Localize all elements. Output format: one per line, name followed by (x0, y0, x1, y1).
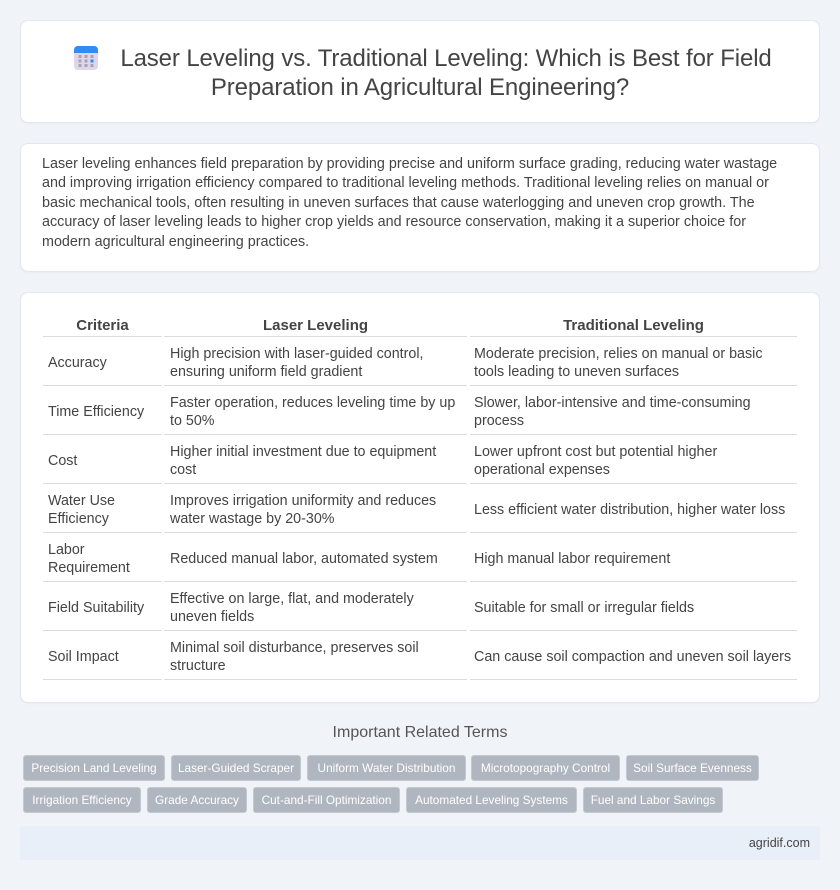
tag (171, 755, 301, 781)
row: soil impact: Minimal soil disturbance, preserves soil (170, 640, 419, 656)
row: accuracy: ensuring uniform field gradient (170, 364, 362, 380)
tag (23, 787, 141, 813)
row: field suitability (48, 591, 694, 625)
tag (307, 755, 466, 781)
tag: Irrigation Efficiency (32, 793, 132, 807)
row: soil impact: Can cause soil compaction and uneven soil layers (474, 649, 791, 665)
description text: Laser leveling enhances field preparation by providing precise and uniform surface grading, reducing water wastage (42, 156, 777, 172)
tag (23, 755, 165, 781)
description text (42, 156, 777, 250)
tag (471, 755, 620, 781)
heading: important related terms: Important Related Terms (333, 724, 507, 741)
row: time efficiency: Faster operation, reduces leveling time by up (170, 395, 455, 411)
row: labor requirement (48, 542, 670, 576)
row: accuracy: Accuracy (48, 355, 107, 371)
row: time efficiency: to 50% (170, 413, 215, 429)
title text: Laser Leveling vs. Traditional Leveling: Which is Best for Field (120, 45, 772, 72)
row: cost: Lower upfront cost but potential higher (474, 444, 717, 460)
tag (147, 787, 247, 813)
description text: basic mechanical tools, often resulting in uneven surfaces that cause waterlogging and uneven crop growth. The (42, 195, 755, 211)
footer bar (20, 826, 820, 860)
row: field suitability: Field Suitability (48, 600, 144, 616)
row: accuracy (48, 346, 762, 380)
row: time efficiency: Time Efficiency (48, 404, 144, 420)
tag: Uniform Water Distribution (318, 761, 455, 775)
table header: traditional leveling: Traditional Leveling (563, 317, 704, 334)
row: cost: cost (170, 462, 196, 478)
tag: Fuel and Labor Savings (591, 793, 715, 807)
row: cost: operational expenses (474, 462, 610, 478)
row: time efficiency: Slower, labor-intensive and time-consuming (474, 395, 751, 411)
row: labor requirement: High manual labor requirement (474, 551, 670, 567)
tag (583, 787, 723, 813)
table header: criteria: Criteria (76, 317, 129, 334)
description text: and improving irrigation efficiency compared to traditional leveling methods. Traditional leveling relies on manual or (42, 175, 769, 191)
row: water use efficiency: Less efficient water distribution, higher water loss (474, 502, 785, 518)
tag (406, 787, 577, 813)
row: field suitability: Effective on large, flat, and moderately (170, 591, 414, 607)
footer source text: agridif.com (749, 836, 810, 850)
row: water use efficiency: water wastage by 20-30% (170, 511, 335, 527)
title text (120, 45, 772, 101)
row: field suitability: Suitable for small or irregular fields (474, 600, 694, 616)
tag (626, 755, 759, 781)
row: accuracy: High precision with laser-guided control, (170, 346, 424, 362)
tag: Microtopography Control (481, 761, 610, 775)
row: field suitability: uneven fields (170, 609, 254, 625)
row: soil impact: Soil Impact (48, 649, 119, 665)
row: soil impact: structure (170, 658, 226, 674)
title text: Preparation in Agricultural Engineering? (211, 74, 629, 101)
row: cost: Higher initial investment due to equipment (170, 444, 436, 460)
row: accuracy: Moderate precision, relies on manual or basic (474, 346, 762, 362)
tag (253, 787, 400, 813)
description text: accuracy of laser leveling leads to higher crop yields and resource conservation, making it a superior choice for (42, 214, 746, 230)
row: labor requirement: Reduced manual labor, automated system (170, 551, 438, 567)
row: soil impact (48, 640, 791, 674)
table header: laser leveling: Laser Leveling (263, 317, 368, 334)
tag: Cut-and-Fill Optimization (262, 793, 391, 807)
row: water use efficiency: Water Use (48, 493, 115, 509)
row: cost: Cost (48, 453, 77, 469)
row: time efficiency: process (474, 413, 524, 429)
related term tags (23, 755, 759, 813)
tag: Automated Leveling Systems (415, 793, 568, 807)
row: labor requirement: Requirement (48, 560, 130, 576)
row: labor requirement: Labor (48, 542, 85, 558)
tag: Soil Surface Evenness (633, 761, 752, 775)
panel: description (20, 143, 820, 272)
row: water use efficiency (48, 493, 785, 527)
row: water use efficiency: Efficiency (48, 511, 109, 527)
icon: calendar (74, 46, 98, 70)
row: water use efficiency: Improves irrigation uniformity and reduces (170, 493, 436, 509)
row: cost (48, 444, 718, 478)
tag: Grade Accuracy (155, 793, 239, 807)
description text: modern agricultural engineering practices. (42, 234, 309, 250)
panel: comparison table (20, 292, 820, 703)
tag: Laser-Guided Scraper (178, 761, 294, 775)
row: time efficiency (48, 395, 751, 429)
tag: Precision Land Leveling (31, 761, 157, 775)
row: accuracy: tools leading to uneven surfaces (474, 364, 679, 380)
panel: title (20, 20, 820, 123)
